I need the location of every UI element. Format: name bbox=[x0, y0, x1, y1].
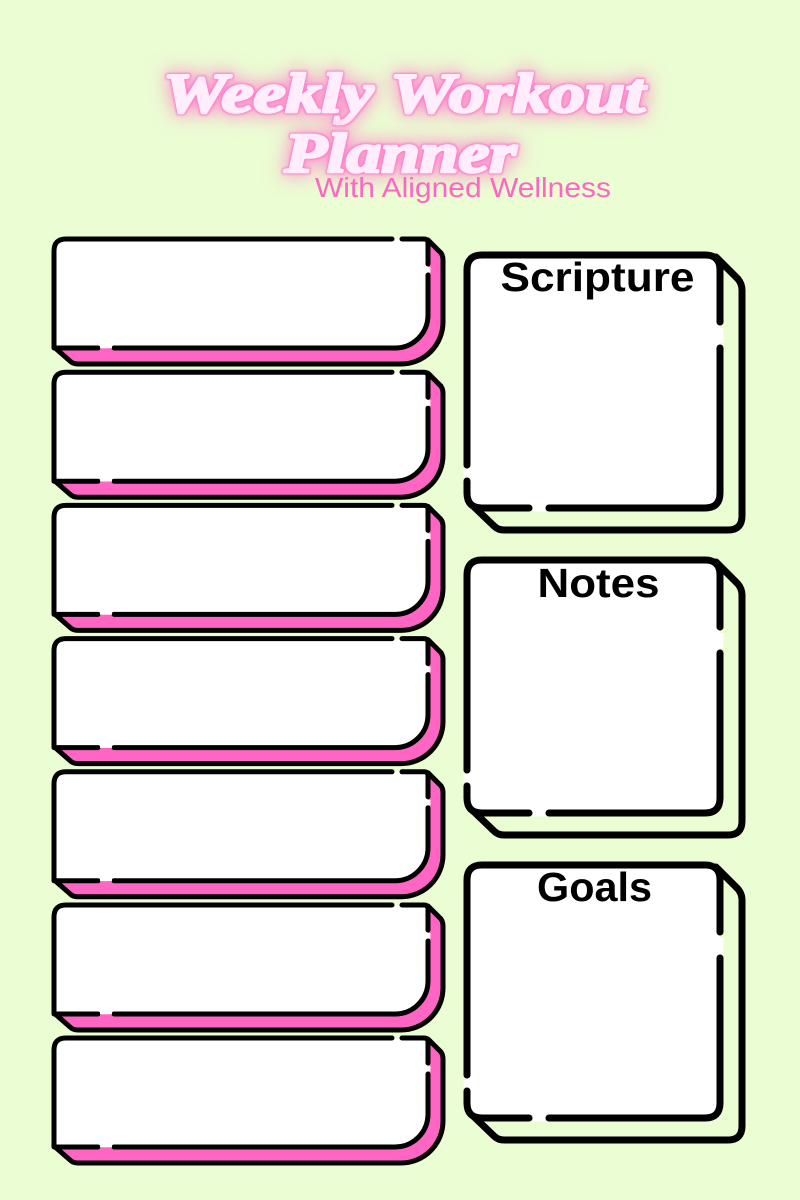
panel: notes bbox=[464, 560, 742, 835]
panel: day card 1 bbox=[54, 239, 443, 364]
title bbox=[163, 63, 647, 185]
panel: day card 3 bbox=[54, 505, 443, 630]
panel: day card 4 bbox=[54, 639, 443, 764]
panel: scripture bbox=[464, 255, 742, 530]
panel: day card 7 bbox=[54, 1038, 443, 1163]
heading: scripture: Scripture bbox=[500, 254, 694, 300]
heading: notes: Notes bbox=[538, 560, 660, 606]
title: Planner bbox=[283, 123, 518, 185]
panel: day card 2 bbox=[54, 372, 443, 497]
subtitle: With Aligned Wellness bbox=[315, 172, 611, 203]
panel: day card 6 bbox=[54, 905, 443, 1030]
title: Weekly Workout bbox=[163, 63, 647, 125]
heading: goals: Goals bbox=[537, 864, 652, 910]
panel: day card 5 bbox=[54, 772, 443, 897]
panel: goals bbox=[464, 865, 742, 1140]
